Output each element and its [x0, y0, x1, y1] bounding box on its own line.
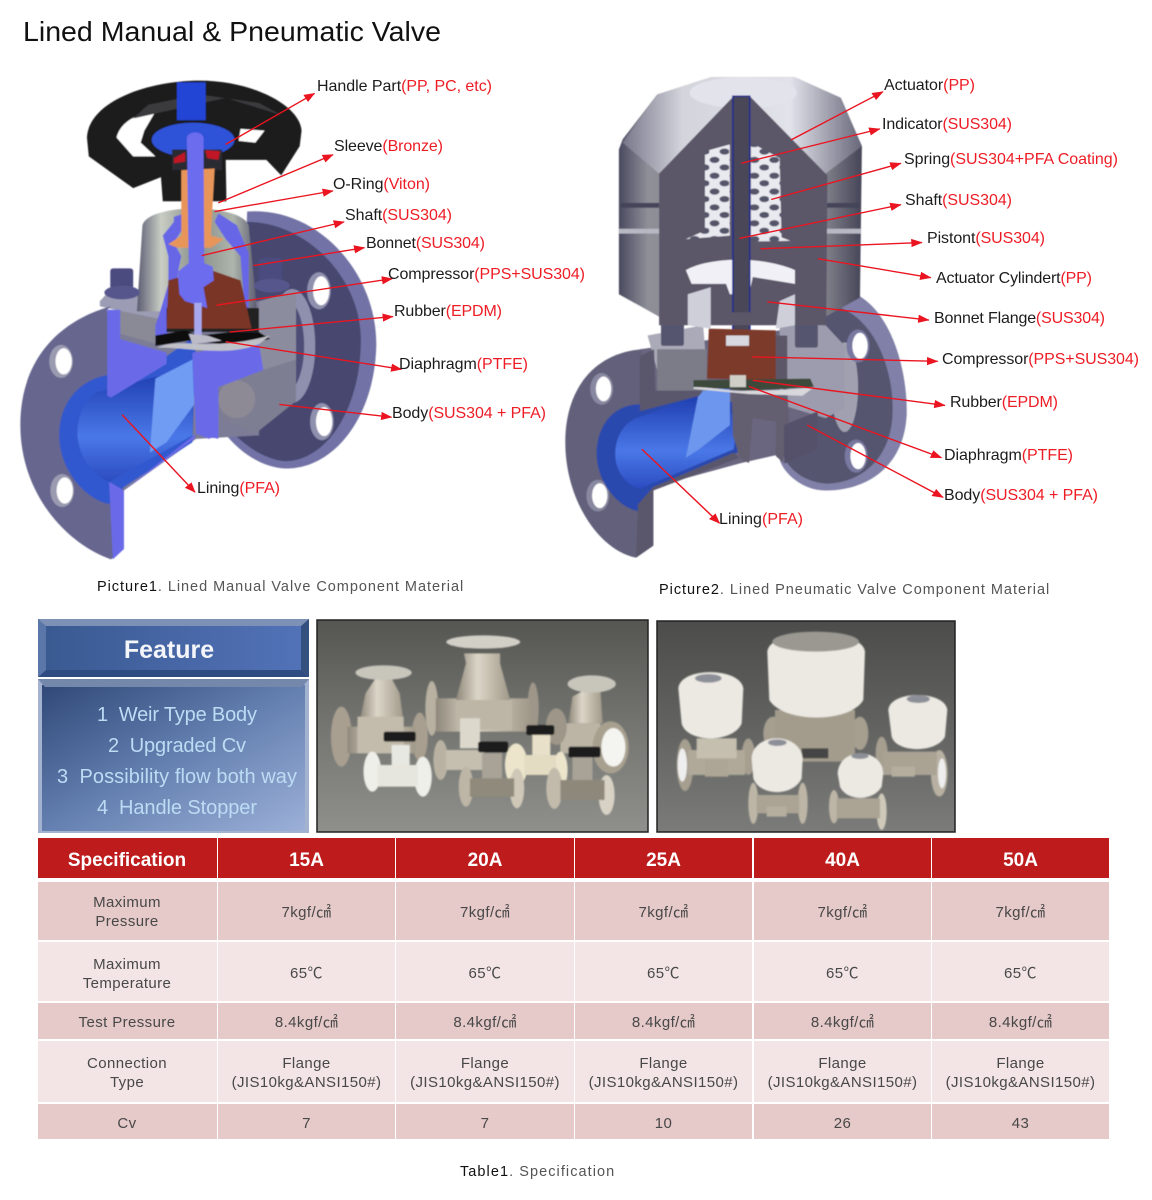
row: maximum temperature: Temperature — [83, 975, 171, 992]
table header row: 15A — [289, 850, 324, 871]
row: maximum temperature: 65℃ — [469, 965, 501, 982]
labels: manual valve components: Sleeve(Bronze) — [334, 138, 443, 155]
feature heading: Feature — [124, 636, 214, 664]
illustration: pneumatic valve cutaway — [565, 77, 907, 558]
labels: pneumatic valve components — [719, 77, 1139, 528]
row: Cv: 7 — [481, 1115, 489, 1132]
labels: pneumatic valve components: Body(SUS304 + PFA) — [944, 487, 1098, 504]
labels: pneumatic valve components: Actuator Cylindert(PP) — [936, 270, 1092, 287]
row: maximum pressure — [38, 882, 1109, 940]
photo: pneumatic valves — [657, 621, 955, 832]
panel: manual valve diagram — [20, 78, 585, 559]
labels: pneumatic valve components: Indicator(SUS304) — [882, 116, 1012, 133]
table header row — [38, 838, 1109, 878]
row: test pressure: 8.4kgf/㎠ — [811, 1014, 874, 1031]
labels: pneumatic valve components: Actuator(PP) — [884, 77, 975, 94]
labels: manual valve components: Compressor(PPS+SUS304) — [388, 266, 585, 283]
labels: manual valve components: Bonnet(SUS304) — [366, 235, 485, 252]
row: maximum pressure: 7kgf/㎠ — [818, 904, 867, 921]
table: specification — [38, 838, 1109, 1139]
labels: pneumatic valve components: Lining(PFA) — [719, 511, 803, 528]
labels: pneumatic valve components: Pistont(SUS304) — [927, 230, 1045, 247]
row: test pressure: Test Pressure — [79, 1014, 175, 1031]
row: maximum temperature — [38, 942, 1109, 1001]
table header row: 40A — [825, 850, 860, 871]
arrows: pneumatic valve callouts — [642, 92, 945, 523]
row: maximum temperature: 65℃ — [826, 965, 859, 982]
caption: picture 1: Picture1. Lined Manual Valve Component Material — [97, 579, 464, 595]
row: maximum temperature: 65℃ — [647, 965, 680, 982]
row: connection type: Flange — [996, 1055, 1045, 1072]
labels: manual valve components: Diaphragm(PTFE) — [399, 356, 528, 373]
feature list: 3 Possibility flow both way — [57, 766, 297, 788]
feature list: 1 Weir Type Body — [97, 704, 257, 726]
row: maximum temperature: Maximum — [93, 956, 161, 973]
labels: manual valve components — [197, 78, 585, 497]
row: Cv: 10 — [655, 1115, 672, 1132]
arrows: manual valve callouts — [122, 93, 401, 492]
panel: feature — [38, 619, 309, 833]
caption: table 1: Table1. Specification — [460, 1164, 615, 1180]
caption: picture 2: Picture2. Lined Pneumatic Valve Component Material — [659, 582, 1050, 598]
row: connection type: (JIS10kg&ANSI150#) — [232, 1074, 381, 1091]
title: Lined Manual & Pneumatic Valve — [23, 16, 441, 47]
row: maximum temperature: 65℃ — [1004, 965, 1037, 982]
labels: pneumatic valve components: Diaphragm(PTFE) — [944, 447, 1073, 464]
feature list — [38, 679, 309, 833]
row: maximum pressure: 7kgf/㎠ — [639, 904, 688, 921]
row: connection type: Flange — [282, 1055, 331, 1072]
row: Cv — [38, 1104, 1109, 1139]
row: test pressure: 8.4kgf/㎠ — [275, 1014, 338, 1031]
row: connection type: (JIS10kg&ANSI150#) — [768, 1074, 917, 1091]
table header row: 20A — [468, 850, 503, 871]
row: connection type: Flange — [639, 1055, 688, 1072]
photo: manual valves — [317, 620, 648, 832]
feature list: 2 Upgraded Cv — [108, 735, 246, 757]
row: Cv: Cv — [117, 1115, 137, 1132]
illustration: manual valve cutaway — [20, 81, 376, 559]
row: test pressure: 8.4kgf/㎠ — [453, 1014, 517, 1031]
labels: manual valve components: Handle Part(PP, PC, etc) — [317, 78, 492, 95]
labels: pneumatic valve components: Spring(SUS304+PFA Coating) — [904, 151, 1118, 168]
row: Cv: 43 — [1012, 1115, 1029, 1132]
row: maximum pressure: 7kgf/㎠ — [460, 904, 510, 921]
labels: manual valve components: Lining(PFA) — [197, 480, 280, 497]
panel: pneumatic valve diagram — [565, 77, 1139, 558]
row: test pressure: 8.4kgf/㎠ — [632, 1014, 695, 1031]
row: maximum pressure: 7kgf/㎠ — [996, 904, 1045, 921]
row: connection type: Flange — [818, 1055, 867, 1072]
row: test pressure — [38, 1003, 1109, 1039]
labels: manual valve components: Shaft(SUS304) — [345, 207, 452, 224]
row: maximum temperature: 65℃ — [290, 965, 323, 982]
table header row: 25A — [646, 850, 681, 871]
row: connection type: Type — [110, 1074, 144, 1091]
feature list: 4 Handle Stopper — [97, 797, 257, 819]
labels: pneumatic valve components: Shaft(SUS304) — [905, 192, 1012, 209]
row: connection type: (JIS10kg&ANSI150#) — [589, 1074, 738, 1091]
row: connection type: Connection — [87, 1055, 167, 1072]
row: connection type: (JIS10kg&ANSI150#) — [946, 1074, 1095, 1091]
row: connection type: Flange — [461, 1055, 509, 1072]
row: connection type — [38, 1041, 1109, 1102]
labels: pneumatic valve components: Bonnet Flange(SUS304) — [934, 310, 1105, 327]
table header row: Specification — [68, 850, 186, 871]
labels: pneumatic valve components: Compressor(PPS+SUS304) — [942, 351, 1139, 368]
labels: pneumatic valve components: Rubber(EPDM) — [950, 394, 1058, 411]
labels: manual valve components: O-Ring(Viton) — [333, 176, 430, 193]
row: maximum pressure: 7kgf/㎠ — [282, 904, 331, 921]
row: Cv: 7 — [302, 1115, 311, 1132]
feature heading — [38, 619, 309, 677]
row: Cv: 26 — [834, 1115, 851, 1132]
row: test pressure: 8.4kgf/㎠ — [989, 1014, 1052, 1031]
labels: manual valve components: Rubber(EPDM) — [394, 303, 502, 320]
row: maximum pressure: Pressure — [95, 913, 159, 930]
row: maximum pressure: Maximum — [93, 894, 161, 911]
table header row: 50A — [1003, 850, 1038, 871]
labels: manual valve components: Body(SUS304 + PFA) — [392, 405, 546, 422]
row: connection type: (JIS10kg&ANSI150#) — [410, 1074, 560, 1091]
